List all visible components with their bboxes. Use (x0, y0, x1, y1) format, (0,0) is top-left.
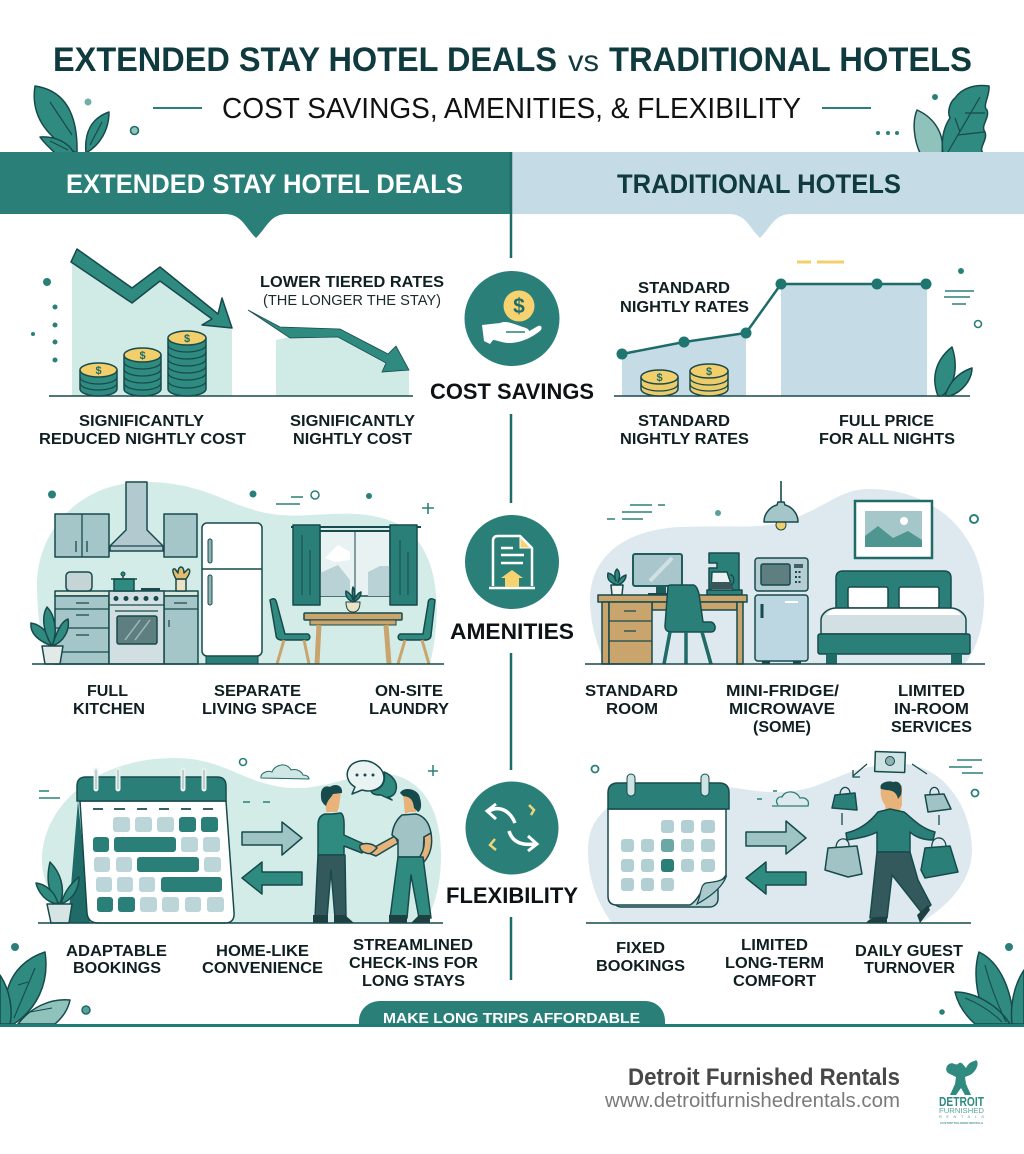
logo: detroit furnished rentals: CUSTOM TAILORED RENTALS (940, 1121, 983, 1125)
icon: gold coins small: $ (656, 372, 663, 384)
labels: extended stay amenities: KITCHEN (73, 701, 145, 718)
icon: gold coins large: $ (706, 366, 712, 378)
icon: desk with drawers (598, 595, 747, 664)
chart: extended stay falling rates (31, 249, 413, 396)
panel header: traditional hotels (512, 152, 1024, 238)
labels: traditional costs: STANDARD (638, 280, 730, 297)
arrow: right (242, 822, 302, 855)
labels: extended stay flexibility: CHECK-INS FOR (349, 955, 478, 972)
labels: extended stay amenities: ON-SITE (375, 683, 443, 700)
labels: traditional amenities: MINI-FRIDGE/ (726, 683, 840, 700)
labels: traditional amenities: (SOME) (753, 719, 811, 736)
icon: flexible calendar (68, 770, 234, 923)
title: vs (568, 45, 599, 78)
text: lower tiered rates (260, 274, 444, 309)
title: TRADITIONAL HOTELS (609, 41, 972, 79)
labels: traditional costs: FOR ALL NIGHTS (819, 431, 955, 448)
subtitle: COST SAVINGS, AMENITIES, & FLEXIBILITY (222, 93, 801, 125)
labels: traditional costs: NIGHTLY RATES (620, 299, 749, 316)
labels: extended stay costs: REDUCED NIGHTLY COST (39, 431, 246, 448)
decoration: top-left leaves (34, 86, 138, 153)
labels: traditional flexibility: BOOKINGS (596, 958, 685, 975)
labels: traditional flexibility: LIMITED (741, 937, 808, 954)
labels: traditional flexibility: TURNOVER (864, 960, 955, 977)
bottom rule (0, 1024, 1024, 1027)
labels: traditional costs (620, 280, 955, 448)
icon: stove and lower cabinets (55, 591, 198, 664)
icon: fixed calendar (608, 774, 729, 907)
title (53, 41, 972, 79)
icon: coin stack medium: $ (139, 350, 146, 362)
logo: detroit furnished rentals: FURNISHED (939, 1106, 985, 1115)
icon: mini fridge (755, 595, 808, 664)
callout: make long trips affordable (359, 1001, 665, 1027)
title: EXTENDED STAY HOTEL DEALS (53, 41, 557, 79)
logo: detroit furnished rentals (939, 1060, 985, 1125)
icon: dining table and chairs (270, 587, 435, 664)
icon: window with curtains (291, 525, 421, 605)
labels: traditional flexibility (596, 937, 963, 990)
panel header: extended stay hotel deals (0, 152, 510, 238)
labels: extended stay costs: SIGNIFICANTLY (290, 413, 415, 430)
icon: cloud (772, 792, 808, 806)
decoration: bottom-right leaves (939, 943, 1024, 1024)
heading: amenities: AMENITIES (450, 619, 574, 644)
icon: amenities document and house (465, 515, 559, 609)
labels: traditional costs: STANDARD (638, 413, 730, 430)
labels: extended stay flexibility: ADAPTABLE (66, 943, 167, 960)
labels: extended stay amenities: LIVING SPACE (202, 701, 317, 718)
icon: coin stack medium (124, 348, 161, 396)
panel header: extended stay hotel deals: EXTENDED STAY HOTEL DEALS (66, 169, 463, 199)
labels: extended stay flexibility: CONVENIENCE (202, 960, 323, 977)
icon: gold coins large (690, 364, 728, 396)
callout: make long trips affordable: MAKE LONG TRIPS AFFORDABLE (383, 1010, 640, 1027)
icon: cost savings hand and coin (464, 271, 560, 366)
labels: extended stay costs: SIGNIFICANTLY (79, 413, 204, 430)
footer brand text: Detroit Furnished Rentals (628, 1064, 900, 1091)
labels: extended stay costs: NIGHTLY COST (293, 431, 412, 448)
icon: floor plant (31, 607, 68, 664)
labels: extended stay amenities: FULL (87, 683, 128, 700)
labels: extended stay flexibility: BOOKINGS (73, 960, 161, 977)
labels: extended stay flexibility: HOME-LIKE (216, 943, 309, 960)
labels: extended stay costs (39, 413, 415, 448)
icon: bed (818, 571, 970, 664)
decoration: top-right leaves (876, 86, 989, 153)
text: lower tiered rates: (THE LONGER THE STAY) (263, 292, 441, 309)
logo: detroit furnished rentals: RENTALS (939, 1114, 984, 1119)
text: lower tiered rates: LOWER TIERED RATES (260, 274, 444, 291)
icon: coin stack small (80, 363, 117, 396)
labels: extended stay amenities (73, 683, 449, 718)
labels: extended stay flexibility: LONG STAYS (362, 973, 465, 990)
icon: gold coins small (641, 370, 678, 396)
labels: traditional amenities: IN-ROOM (894, 701, 969, 718)
icon: two people shaking hands (313, 761, 432, 923)
labels: traditional costs: FULL PRICE (839, 413, 934, 430)
arrow: right (746, 821, 806, 854)
footer brand text (604, 1064, 900, 1112)
labels: traditional flexibility: DAILY GUEST (855, 943, 963, 960)
icon: potted plant (36, 862, 79, 923)
decoration: bottom-left leaves (0, 943, 90, 1024)
icon: chair (664, 585, 715, 664)
panel header: traditional hotels: TRADITIONAL HOTELS (617, 169, 901, 199)
icon: pendant lamp (764, 481, 798, 530)
arrow: left (242, 862, 302, 894)
labels: traditional amenities: SERVICES (891, 719, 972, 736)
logo: detroit furnished rentals: DETROIT (939, 1094, 984, 1109)
icon: microwave (755, 558, 808, 591)
icon: plant (935, 347, 972, 396)
labels: extended stay flexibility: STREAMLINED (353, 937, 473, 954)
icon: refrigerator (202, 523, 262, 664)
icon: framed picture (855, 501, 932, 558)
labels: traditional flexibility: LONG-TERM (725, 955, 824, 972)
center divider (510, 152, 512, 980)
labels: extended stay amenities: LAUNDRY (369, 701, 449, 718)
chart: traditional hotel flat rates (614, 262, 982, 396)
illustration: fixed calendar and turnover (586, 751, 983, 923)
heading: flexibility: FLEXIBILITY (446, 883, 578, 908)
labels: extended stay amenities: SEPARATE (214, 683, 301, 700)
icon: coin stack tall (168, 331, 206, 396)
labels: traditional amenities: MICROWAVE (729, 701, 835, 718)
labels: traditional amenities: LIMITED (898, 683, 965, 700)
icon: cloud (261, 765, 309, 779)
illustration: standard hotel room (585, 481, 985, 664)
icon: monitor and desk plant (608, 554, 682, 595)
labels: extended stay flexibility (66, 937, 478, 990)
icon: coin stack tall: $ (184, 333, 190, 345)
footer brand text: www.detroitfurnishedrentals.com (604, 1090, 900, 1112)
icon: coffee maker (707, 553, 742, 595)
icon: cost savings hand and coin: $ (513, 295, 525, 318)
icon: toaster, pot and utensils (66, 567, 190, 591)
illustration: adaptable calendar and handshake (36, 758, 443, 923)
labels: traditional flexibility: FIXED (616, 940, 665, 957)
labels: traditional flexibility: COMFORT (733, 973, 816, 990)
icon: upper cabinets and hood (55, 482, 197, 557)
icon: flexibility arrows (466, 782, 558, 874)
arrow: left (746, 862, 806, 894)
labels: traditional costs: NIGHTLY RATES (620, 431, 749, 448)
icon: coin stack small: $ (95, 365, 102, 377)
labels: traditional amenities (585, 683, 972, 736)
labels: traditional amenities: STANDARD (585, 683, 678, 700)
heading: cost savings: COST SAVINGS (430, 379, 594, 404)
icon: person with shopping bags (825, 751, 958, 923)
labels: traditional amenities: ROOM (606, 701, 658, 718)
illustration: kitchen and living space (31, 482, 444, 664)
